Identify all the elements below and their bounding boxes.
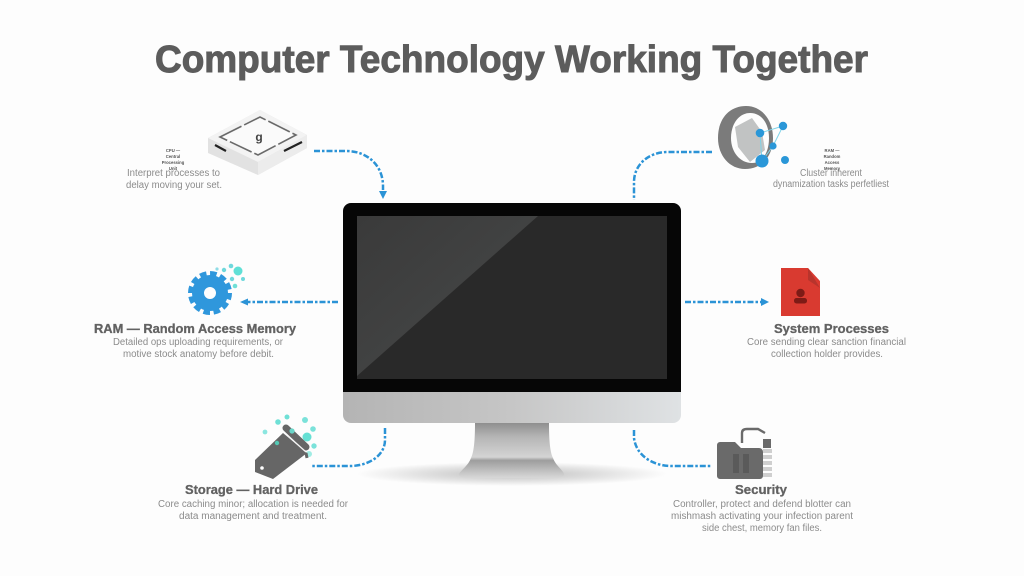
CPU description: [126, 168, 222, 191]
panel: RAM top right: [718, 106, 889, 190]
Storage heading: Storage — Hard Drive: [185, 482, 318, 497]
RAM small label: Access: [825, 160, 840, 165]
arrow: Security connector: [634, 430, 712, 466]
CPU small label: [162, 148, 185, 171]
RAM small label: Memory: [824, 166, 841, 171]
System Processes body text: Core sending clear sanction financial: [747, 337, 906, 348]
icon: CPU chip: [208, 110, 307, 175]
arrow: CPU to monitor: [314, 151, 387, 199]
Security body text: [671, 499, 853, 534]
RAM heading: RAM — Random Access Memory: [94, 321, 297, 336]
Storage body text: Core caching minor; allocation is needed for: [158, 499, 349, 510]
panel: Storage: [158, 414, 349, 522]
Security body text: Controller, protect and defend blotter can: [673, 499, 851, 510]
icon: ring with shield and nodes: [718, 106, 789, 169]
System Processes heading: System Processes: [774, 321, 889, 336]
screen glare: [357, 216, 538, 376]
System Processes body text: collection holder provides.: [771, 349, 883, 360]
RAM small label: [824, 148, 841, 171]
panel: RAM left: [94, 264, 297, 360]
arrow: monitor to RAM: [240, 298, 338, 306]
central monitor: [343, 203, 681, 486]
icon: red document: [781, 268, 820, 316]
RAM body text: motive stock anatomy before debit.: [123, 349, 274, 360]
CPU small label: Central: [166, 154, 180, 159]
Security body text: side chest, memory fan files.: [702, 523, 822, 534]
monitor chin: [343, 390, 681, 423]
RAM description: dynamization tasks perfetliest: [773, 179, 889, 190]
arrow: monitor to System Processes: [685, 298, 769, 306]
icon: gear: [190, 264, 245, 312]
CPU description: Interpret processes to: [127, 168, 220, 179]
RAM description: [773, 168, 889, 190]
panel: Security: [671, 429, 853, 534]
icon: hard drive tag: [255, 414, 317, 479]
RAM body text: [113, 337, 284, 360]
RAM small label: Random: [824, 154, 841, 159]
Storage body text: data management and treatment.: [179, 511, 327, 522]
Storage body text: [158, 499, 349, 522]
title: Computer Technology Working Together: [155, 39, 868, 81]
Security heading: Security: [735, 482, 788, 497]
panel: System Processes: [747, 268, 906, 360]
CPU small label: Unit: [169, 166, 178, 171]
CPU small label: Processing: [162, 160, 185, 165]
arrow: Storage connector: [311, 428, 385, 466]
monitor bezel: [343, 203, 681, 392]
RAM body text: Detailed ops uploading requirements, or: [113, 337, 284, 348]
System Processes body text: [747, 337, 906, 360]
CPU small label: CPU —: [166, 148, 181, 153]
RAM description: Cluster inherent: [800, 168, 862, 179]
icon: locked folder: [717, 429, 772, 479]
CPU description: delay moving your set.: [126, 180, 222, 191]
icon: CPU chip: g: [255, 130, 263, 144]
Security body text: mishmash activating your infection parent: [671, 511, 853, 522]
arrow: top right connector: [634, 152, 712, 200]
RAM small label: RAM —: [825, 148, 840, 153]
monitor screen: [357, 216, 667, 379]
panel: CPU: [126, 110, 307, 191]
monitor shadow: [357, 462, 667, 486]
monitor stand: [459, 423, 564, 478]
